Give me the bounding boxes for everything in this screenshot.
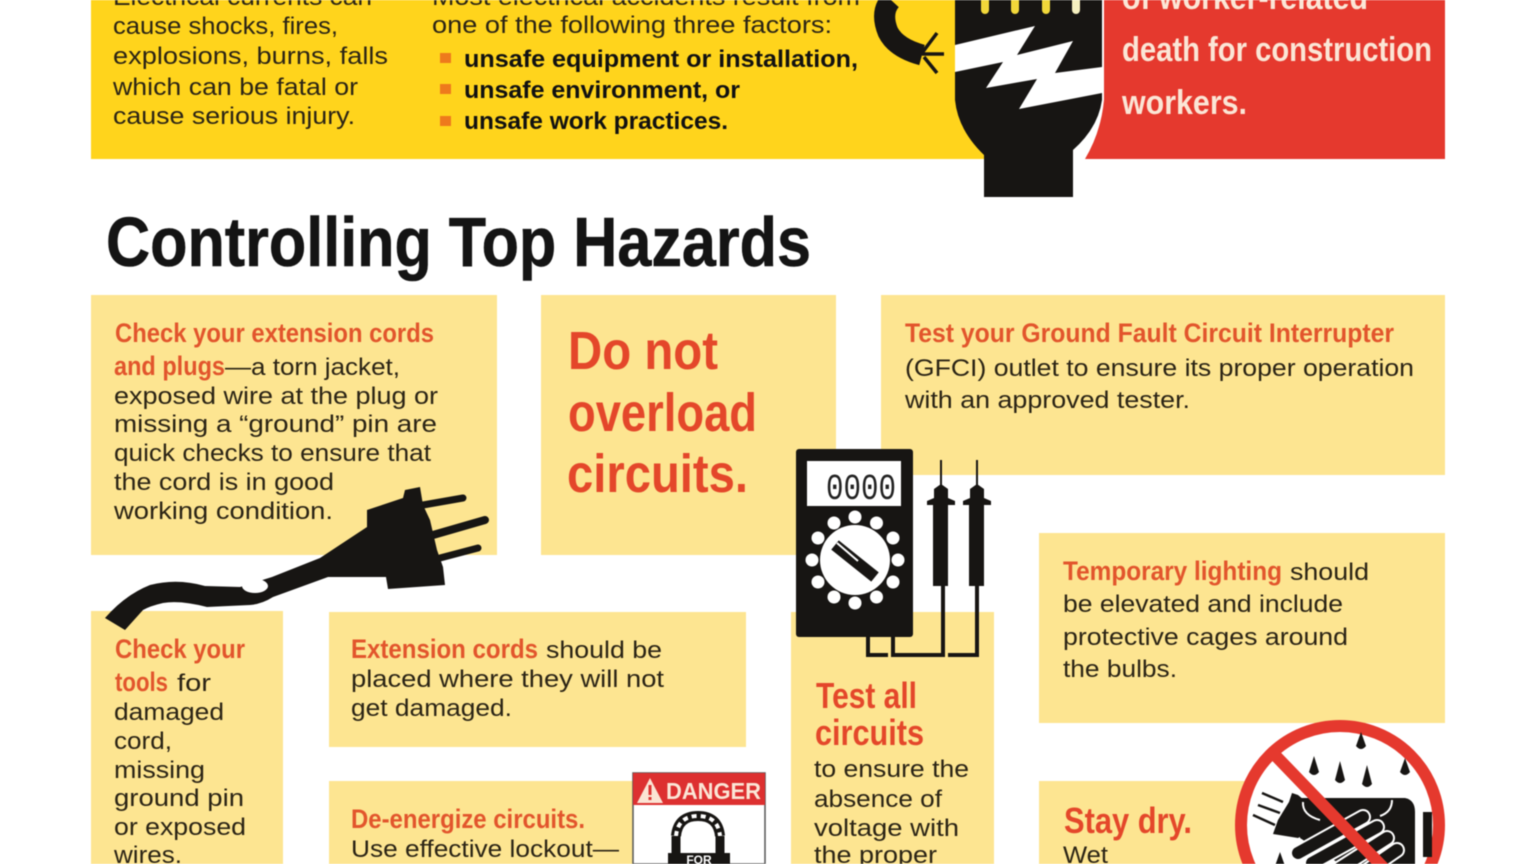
panel: red statistic callout bbox=[1085, 0, 1445, 159]
panel: de-energize circuits: Use effective lockout— bbox=[351, 836, 619, 863]
icon: damaged plug and cord bbox=[105, 487, 485, 630]
heading: Controlling Top Hazards: Controlling Top Hazards bbox=[106, 203, 811, 281]
panel: do not overload circuits: Do not bbox=[568, 321, 718, 381]
panel: red statistic callout: death for construction bbox=[1122, 31, 1432, 69]
text block: electrical currents effects: cause shocks, fires, bbox=[113, 13, 338, 40]
panel: extension cord placement: get damaged. bbox=[351, 695, 512, 722]
panel: do not overload circuits: circuits. bbox=[567, 444, 748, 504]
text block: accident factors list: one of the following three factors: bbox=[432, 12, 832, 39]
panel: check extension cords and plugs: quick checks to ensure that bbox=[114, 440, 431, 467]
text block: electrical currents effects: which can be fatal or bbox=[112, 74, 358, 101]
panel: de-energize circuits bbox=[329, 781, 746, 864]
panel: check extension cords and plugs: —a torn jacket, bbox=[225, 354, 400, 381]
icon: large plug with lightning bolt bbox=[885, 0, 1102, 197]
panel: temporary lighting: be elevated and include bbox=[1063, 591, 1343, 618]
panel: de-energize circuits: De-energize circuits. bbox=[351, 804, 585, 834]
panel: check extension cords and plugs: Check your extension cords bbox=[115, 318, 434, 348]
panel: check your tools: tools bbox=[115, 667, 168, 697]
panel: check extension cords and plugs: missing a “ground” pin are bbox=[114, 411, 437, 438]
panel: check extension cords and plugs: working condition. bbox=[113, 498, 333, 525]
panel: check extension cords and plugs: and plugs bbox=[114, 351, 225, 381]
panel: check your tools: missing bbox=[114, 757, 205, 784]
panel: check extension cords and plugs: the cord is in good bbox=[114, 469, 334, 496]
panel: extension cord placement: placed where they will not bbox=[351, 666, 664, 693]
panel: temporary lighting: Temporary lighting bbox=[1063, 556, 1282, 586]
panel: test your GFCI: with an approved tester. bbox=[904, 387, 1190, 414]
panel: do not overload circuits bbox=[541, 295, 836, 555]
icon: multimeter with probes: 0000 bbox=[826, 469, 896, 510]
panel: check your tools: ground pin bbox=[114, 785, 244, 812]
panel: test your GFCI bbox=[881, 295, 1445, 475]
panel: do not overload circuits: overload bbox=[568, 383, 757, 443]
panel: check your tools bbox=[91, 611, 283, 864]
panel: check extension cords and plugs: exposed wire at the plug or bbox=[114, 383, 438, 410]
text block: accident factors list: unsafe equipment or installation, bbox=[464, 46, 858, 73]
panel: test all circuits: voltage with bbox=[814, 815, 959, 842]
panel: test all circuits: circuits bbox=[815, 712, 924, 753]
panel: test all circuits: absence of bbox=[814, 786, 942, 813]
panel: extension cord placement bbox=[329, 612, 746, 747]
panel: extension cord placement: Extension cords bbox=[351, 634, 538, 664]
icon: multimeter with probes bbox=[796, 449, 991, 655]
icon: no wet hands prohibition sign bbox=[1241, 726, 1439, 864]
panel: check extension cords and plugs bbox=[91, 295, 497, 555]
panel: check your tools: or exposed bbox=[114, 814, 246, 841]
text block: accident factors list bbox=[432, 0, 860, 135]
panel: test all circuits: to ensure the bbox=[814, 756, 969, 783]
panel: temporary lighting: protective cages around bbox=[1063, 624, 1348, 651]
panel: check your tools: Check your bbox=[115, 634, 245, 664]
icon: danger lockout sign: DANGER bbox=[666, 778, 761, 804]
panel: red statistic callout: workers. bbox=[1121, 84, 1247, 122]
text block: accident factors list: unsafe work practices. bbox=[464, 108, 728, 135]
text block: accident factors list: unsafe environment, or bbox=[464, 77, 740, 104]
panel: stay dry bbox=[1039, 781, 1339, 864]
panel: check your tools: damaged bbox=[114, 699, 224, 726]
panel: yellow introduction bbox=[91, 0, 991, 159]
text block: electrical currents effects: explosions, burns, falls bbox=[113, 43, 388, 70]
icon: danger lockout sign bbox=[633, 773, 765, 864]
panel: check your tools: for bbox=[177, 670, 211, 697]
panel: stay dry: Stay dry. bbox=[1064, 800, 1192, 841]
panel: temporary lighting: the bulbs. bbox=[1063, 656, 1177, 683]
panel: test all circuits: Test all bbox=[816, 675, 917, 716]
panel: check your tools: cord, bbox=[114, 728, 172, 755]
panel: test all circuits bbox=[791, 612, 994, 864]
text block: electrical currents effects: cause serious injury. bbox=[113, 103, 355, 130]
panel: test your GFCI: Test your Ground Fault Circuit Interrupter bbox=[905, 318, 1394, 348]
panel: temporary lighting bbox=[1039, 533, 1445, 723]
panel: temporary lighting: should bbox=[1290, 559, 1369, 586]
panel: test your GFCI: (GFCI) outlet to ensure its proper operation bbox=[905, 355, 1414, 382]
panel: extension cord placement: should be bbox=[546, 637, 662, 664]
text block: electrical currents effects bbox=[112, 0, 388, 130]
